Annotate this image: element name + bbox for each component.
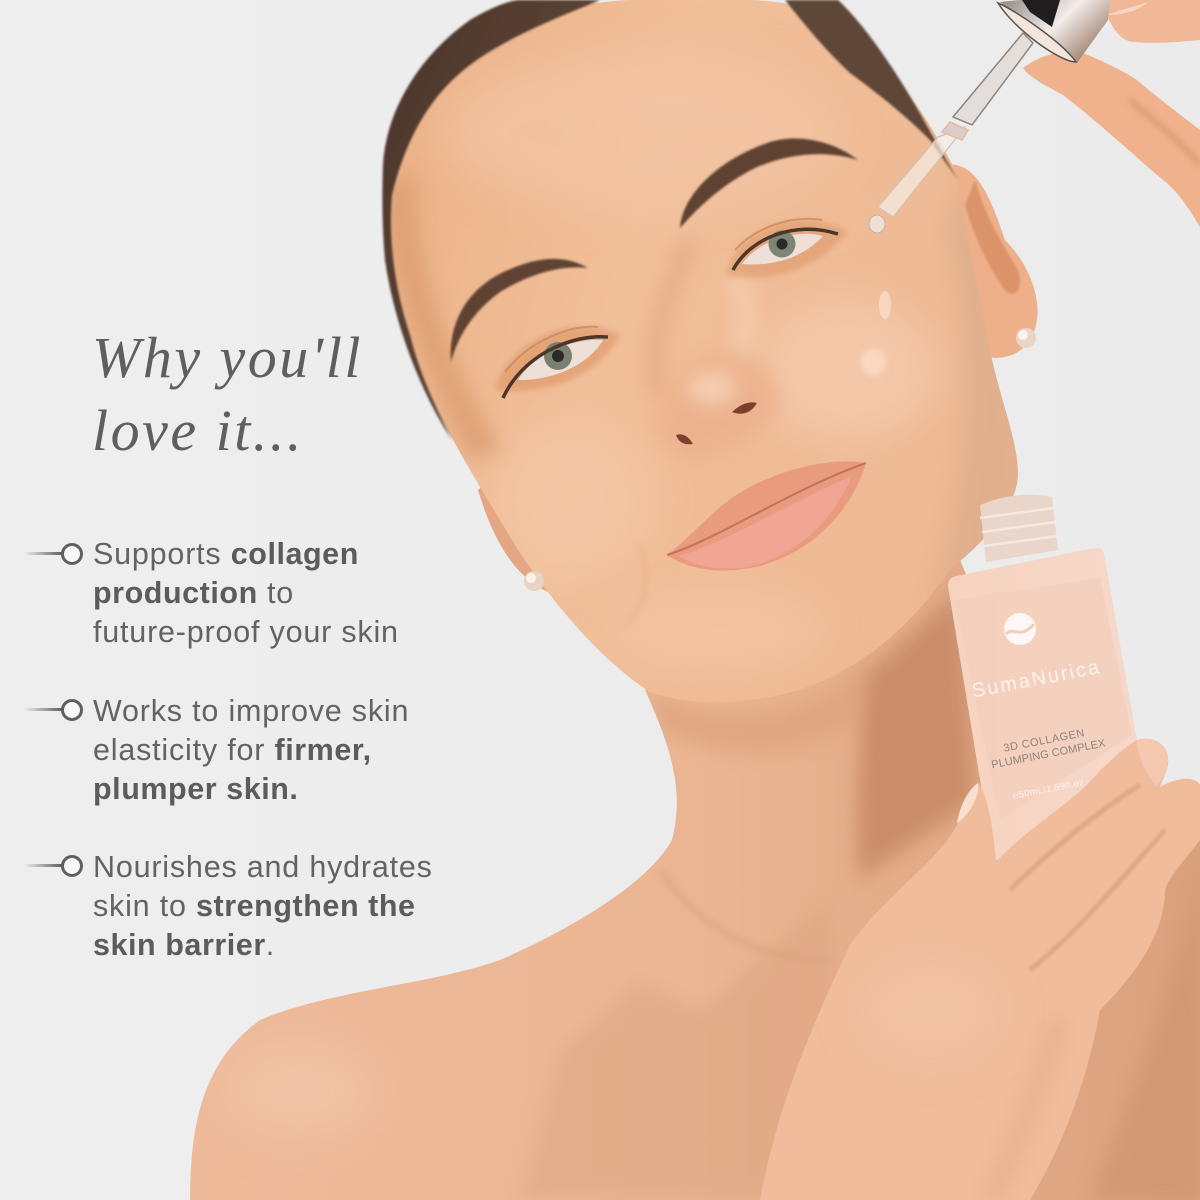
earring: left [524,571,544,591]
earring: right [1016,328,1036,348]
face [385,0,1030,702]
hand: upper fingers [1023,0,1200,227]
bullet icon [24,700,82,720]
benefit 3 [24,850,433,962]
eyebrow: right [680,138,858,228]
bottle label text: PLUMPING COMPLEX [990,737,1107,771]
benefit text: skin to [93,889,196,923]
benefit text: firmer, [274,733,372,767]
illustration: serum bottle [948,495,1137,862]
benefit text: skin barrier [93,928,266,962]
neck and shoulders [190,560,1200,1200]
ear: left [478,470,560,592]
benefit 1 [24,537,399,649]
hair [382,0,958,440]
bottle logo [1004,613,1036,645]
dropper: glass pipette [869,33,1033,233]
title: love it... [92,398,304,463]
eye: right [725,219,848,278]
bottle body [948,548,1137,862]
bottle label text: SumaNurica [970,656,1103,703]
benefit text: Works to improve skin [93,694,409,728]
ear: right [945,165,1038,358]
benefit text: plumper skin. [93,772,298,806]
bottle label text [970,656,1123,806]
illustration: hand with dropper [869,0,1200,233]
bottle label text: 3D COLLAGEN [1003,727,1086,755]
benefit text: . [266,928,275,962]
benefit text: elasticity for [93,733,274,767]
benefit text: production [93,576,258,610]
benefit text: strengthen the [196,889,416,923]
eyebrow: left [451,259,588,362]
benefit text: Nourishes and hydrates [93,850,433,884]
eye: left [495,327,620,398]
benefit 2 [24,694,409,806]
bottle label text: ℮50mL/1.69fl.oz [1012,777,1085,802]
nose [655,350,778,462]
bottle liquid [955,578,1132,820]
benefit text: to [258,576,294,610]
lips [667,461,866,570]
bullet icon [24,544,82,564]
bottle neck [980,495,1058,562]
illustration: hand holding bottle [760,739,1200,1200]
title: Why you'll [92,325,363,390]
bullet icon [24,856,82,876]
title [92,325,363,463]
benefit text: collagen [231,537,359,571]
benefit text: future-proof your skin [93,615,399,649]
serum drops [860,291,891,376]
benefit text: Supports [93,537,231,571]
dropper: metal collar [998,0,1110,63]
